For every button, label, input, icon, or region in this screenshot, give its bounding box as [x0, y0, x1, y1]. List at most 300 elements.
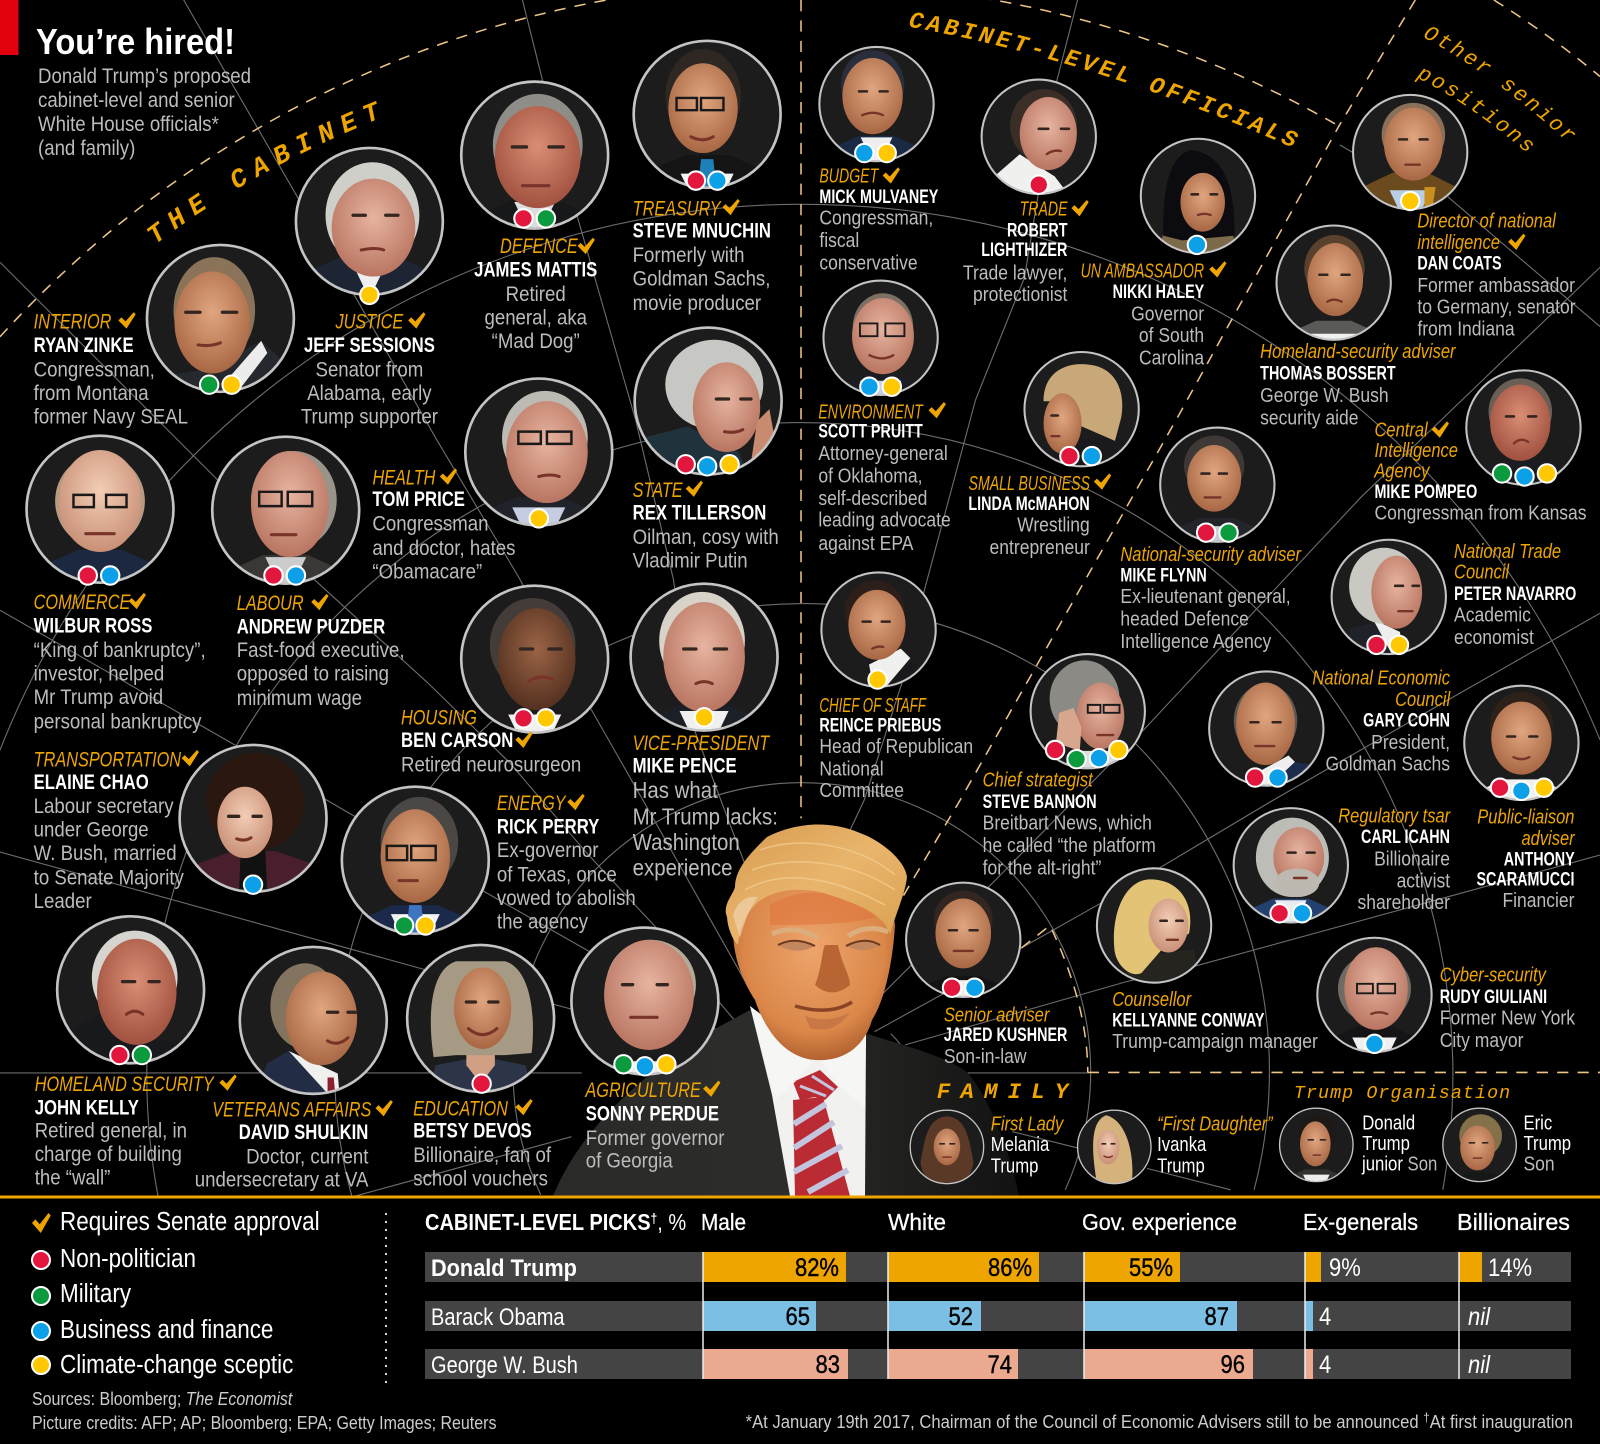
portrait: James Mattis [459, 82, 610, 245]
text: Commerce: WILBUR ROSS [34, 615, 153, 638]
portrait: Jared Kushner [905, 882, 1022, 998]
text: Commerce [34, 591, 206, 734]
portrait: Rudy Giuliani [1316, 936, 1433, 1054]
text: Agriculture: Former governor [586, 1127, 725, 1150]
text: Veterans affairs: VETERANS AFFAIRS [212, 1098, 372, 1122]
footnotes: † [1423, 1410, 1430, 1425]
text: Labour: ANDREW PUZDER [237, 616, 385, 639]
text: Veterans affairs: DAVID SHULKIN [239, 1121, 368, 1144]
text: Housing: Retired neurosurgeon [401, 753, 581, 777]
text: National Economic Council: GARY COHN [1363, 709, 1450, 731]
text: Commerce: “King of bankruptcy”, [34, 639, 206, 662]
text: Vice-president: MIKE PENCE [633, 755, 737, 778]
portrait: Tom Price [464, 377, 614, 529]
text: Health: and doctor, hates [372, 537, 515, 560]
text: Eric Trump: Son [1523, 1152, 1555, 1175]
chart: cabinet-level picks: , % [657, 1208, 686, 1235]
text: National-security adviser [1120, 543, 1302, 652]
portrait: Mike Flynn [1159, 426, 1276, 543]
portrait: Ryan Zinke [147, 245, 294, 396]
text: Budget: Congressman, [819, 206, 933, 229]
text: Energy: vowed to abolish [497, 887, 636, 910]
Donald Trump portrait [553, 824, 1019, 1196]
text: Commerce: personal bankruptcy [34, 710, 202, 734]
text: Senior adviser: JARED KUSHNER [944, 1024, 1067, 1045]
text: National Economic Council: National Economic [1312, 666, 1450, 689]
text: Labour: Fast-food executive, [237, 639, 405, 662]
portrait: Ivanka Trump [1078, 1110, 1151, 1184]
text: Donald Trump junior [1361, 1111, 1437, 1175]
text: Cyber-security: City mayor [1440, 1029, 1523, 1051]
text: Energy: RICK PERRY [497, 816, 599, 839]
text: Budget: BUDGET [819, 164, 879, 187]
text: State [633, 479, 779, 573]
bars: Barack Obama: 4 [1319, 1303, 1331, 1330]
text: Labour: opposed to raising [237, 662, 389, 686]
text: Small business [968, 471, 1111, 558]
text: Director of national intelligence: Director of national [1417, 209, 1557, 232]
heading: CABINET-LEVEL OFFICIALS: CABINET-LEVEL OFFICIALS [910, 12, 1298, 146]
text: Donald Trump junior: Donald [1362, 1111, 1415, 1134]
text: Chief of staff: Committee [819, 779, 904, 801]
text: Chief strategist: STEVE BANNON [983, 791, 1097, 813]
text: Counsellor: Trump-campaign manager [1112, 1030, 1318, 1052]
bars: Barack Obama: 52 [949, 1303, 973, 1330]
text: Counsellor [1112, 988, 1318, 1052]
text: Central Intelligence Agency [1373, 418, 1587, 524]
chart: cabinet-level picks: Male [701, 1209, 746, 1235]
text: First Daughter: Ivanka [1157, 1133, 1207, 1155]
text: Education [413, 1097, 551, 1191]
text: Justice: Senator from [316, 358, 423, 382]
text: National Economic Council [1312, 666, 1451, 775]
text: National Trade Council: National Trade [1454, 540, 1561, 563]
text: Cyber-security: Cyber-security [1440, 963, 1548, 986]
text: Homeland-security adviser: security aide [1260, 406, 1358, 429]
text: Director of national intelligence [1417, 209, 1576, 340]
text: National Economic Council: Goldman Sachs [1325, 752, 1450, 775]
text: Environment: self-described [818, 487, 927, 509]
portrait: Andrew Puzder [210, 437, 361, 600]
text: Education: BETSY DEVOS [413, 1120, 532, 1143]
portrait: Donald Trump junior [1278, 1108, 1354, 1182]
text: Chief strategist: Breitbart News, which [983, 812, 1152, 834]
text: Transportation: Leader [34, 890, 92, 913]
text: State: Vladimir Putin [633, 549, 748, 573]
text: Director of national intelligence: intelligence [1417, 230, 1500, 253]
text: Transportation: Labour secretary [34, 795, 174, 819]
text: Public-liaison adviser: SCARAMUCCI [1476, 869, 1574, 890]
text: Transportation: to Senate Majority [34, 867, 184, 890]
text: National-security adviser: Ex-lieutenant general, [1120, 585, 1291, 607]
portrait: Eric Trump [1442, 1108, 1517, 1182]
portrait: Elaine Chao [180, 745, 327, 896]
text: Defence: “Mad Dog” [492, 330, 580, 353]
bars: Donald Trump: 82% [795, 1254, 839, 1281]
text: Vice-president: experience [633, 854, 733, 881]
chart: cabinet-level picks: White [888, 1209, 946, 1235]
text: Interior: from Montana [34, 382, 149, 405]
text: Health [372, 467, 515, 584]
portrait: Dan Coats [1352, 94, 1468, 212]
text: Public-liaison adviser [1476, 805, 1575, 911]
text: Treasury: Formerly with [633, 244, 744, 268]
bars: Donald Trump: 55% [1129, 1254, 1173, 1281]
text: Central Intelligence Agency: Congressman from Kansas [1374, 501, 1587, 524]
title: Donald Trump’s proposed [38, 65, 251, 88]
bars: George W. Bush: nil [1468, 1351, 1491, 1378]
text: National Trade Council: economist [1454, 626, 1535, 648]
text: Commerce: investor, helped [34, 662, 164, 686]
portrait: Wilbur Ross [24, 436, 176, 595]
text: Small business: SMALL BUSINESS [969, 471, 1090, 494]
text: UN ambassador: NIKKI HALEY [1113, 281, 1205, 303]
bars: Donald Trump [431, 1252, 1532, 1282]
text: Central Intelligence Agency: Intelligence [1374, 439, 1458, 461]
text: Environment: SCOTT PRUITT [818, 421, 923, 442]
text: Chief of staff: Head of Republican [819, 735, 973, 757]
legend: Non-politician [60, 1245, 196, 1273]
text: National Trade Council: Council [1454, 560, 1510, 583]
bars: Barack Obama: 65 [786, 1303, 810, 1330]
text: Justice: Trump supporter [301, 405, 438, 429]
divider line above legend [0, 1196, 1600, 1198]
text: National Economic Council: President, [1371, 731, 1450, 753]
chart: cabinet-level picks: † [651, 1210, 657, 1226]
portrait: Kellyanne Conway [1097, 868, 1211, 986]
text: Budget: conservative [819, 251, 918, 274]
text: First Daughter: Trump [1157, 1154, 1205, 1177]
text: Agriculture: AGRICULTURE [585, 1079, 701, 1103]
text: Small business: LINDA McMAHON [968, 493, 1090, 515]
text: Commerce: Mr Trump avoid [34, 686, 163, 709]
portrait: John Kelly [57, 916, 204, 1067]
text: Eric Trump [1523, 1111, 1571, 1175]
text: Homeland-security adviser: George W. Bush [1260, 384, 1389, 406]
chart: cabinet-level picks [425, 1208, 1571, 1379]
text: Regulatory tsar: activist [1397, 870, 1451, 892]
chart: cabinet-level picks: Billionaires [1457, 1209, 1570, 1235]
portrait: Steve Mnuchin [632, 40, 782, 191]
text: Small business: entrepreneur [990, 536, 1090, 558]
text: Director of national intelligence: DAN COATS [1417, 252, 1502, 274]
text: Budget [819, 164, 939, 274]
bars: Donald Trump: Donald Trump [431, 1254, 577, 1281]
text: National Trade Council [1454, 540, 1576, 648]
text: Agriculture [585, 1079, 725, 1173]
text: Trade: LIGHTHIZER [981, 239, 1067, 261]
portrait: Rex Tillerson [635, 328, 782, 479]
portrait: Linda McMahon [1024, 352, 1139, 470]
text: Eric Trump: Eric [1523, 1111, 1552, 1134]
text: UN ambassador: Governor [1131, 302, 1204, 325]
portrait: Anthony Scaramucci [1463, 686, 1580, 814]
text: Small business: Wrestling [1017, 514, 1090, 536]
text: Vice-president: Mr Trump lacks: [633, 803, 778, 830]
portrait: Sonny Perdue [570, 926, 720, 1076]
text: Housing: HOUSING [401, 706, 477, 730]
text: Defence: general, aka [484, 306, 588, 330]
text: Veterans affairs [195, 1098, 393, 1192]
text: Interior: INTERIOR [34, 311, 112, 334]
heading: Other senior positions: Other senior [1424, 27, 1576, 137]
text: Education: EDUCATION [413, 1097, 508, 1121]
text: Interior: former Navy SEAL [34, 405, 188, 429]
text: Central Intelligence Agency: MIKE POMPEO [1374, 481, 1477, 503]
text: Justice: Alabama, early [307, 382, 432, 405]
text: Vice-president: Washington [633, 829, 740, 855]
text: Chief strategist: Chief strategist [983, 768, 1094, 791]
legend: Requires Senate approval [60, 1208, 320, 1236]
text: Energy: the agency [497, 910, 588, 934]
text: Housing: BEN CARSON [401, 729, 513, 753]
text: Interior: RYAN ZINKE [34, 334, 134, 358]
bars: George W. Bush: 4 [1319, 1351, 1331, 1378]
text: Chief of staff [819, 695, 973, 801]
text: Homeland-security adviser: THOMAS BOSSERT [1260, 363, 1396, 384]
text: First Lady [991, 1112, 1065, 1177]
text: Defence: Retired [506, 283, 566, 306]
bars: Donald Trump: 86% [988, 1254, 1032, 1281]
text: Trade: Trade lawyer, [963, 262, 1067, 284]
text: First Daughter [1157, 1112, 1273, 1177]
text: Chief of staff: National [819, 757, 884, 780]
text: Transportation: W. Bush, married [34, 842, 177, 866]
text: Counsellor: KELLYANNE CONWAY [1112, 1009, 1265, 1031]
text: Donald Trump junior: junior Son [1361, 1152, 1437, 1175]
chart: cabinet-level picks: Gov. experience [1082, 1209, 1237, 1235]
text: National-security adviser: Intelligence Agency [1120, 630, 1272, 652]
text: Agriculture: SONNY PERDUE [586, 1103, 719, 1126]
text: Chief of staff: CHIEF OF STAFF [819, 695, 927, 717]
text: Treasury: STEVE MNUCHIN [633, 220, 771, 243]
text: First Lady: Melania [991, 1133, 1050, 1155]
text: Treasury: movie producer [633, 292, 761, 316]
text: Senior adviser: Son-in-law [944, 1045, 1027, 1068]
text: Regulatory tsar: shareholder [1358, 891, 1450, 913]
sources [32, 1388, 497, 1433]
text: Treasury: Goldman Sachs, [633, 268, 770, 291]
text: Energy: ENERGY [497, 792, 567, 816]
text: Budget: MICK MULVANEY [819, 186, 939, 208]
text: Senior adviser: Senior adviser [944, 1003, 1050, 1026]
title: (and family) [38, 137, 135, 160]
bars: Barack Obama: 87 [1205, 1303, 1229, 1330]
text: First Lady: First Lady [991, 1112, 1065, 1135]
text: Homeland security: Retired general, in [35, 1120, 187, 1143]
text: Regulatory tsar: Billionaire [1374, 847, 1450, 870]
bars: Barack Obama: nil [1468, 1303, 1491, 1330]
chart: cabinet-level picks: Ex-generals [1303, 1209, 1418, 1235]
footnotes: At first inauguration [1430, 1411, 1573, 1432]
text: Cyber-security [1440, 963, 1576, 1051]
text: Environment: leading advocate [818, 508, 951, 531]
text: National Economic Council: Council [1395, 688, 1451, 710]
text: Education: Billionaire, fan of [413, 1144, 551, 1168]
text: Transportation: ELAINE CHAO [34, 771, 149, 794]
legend [32, 1208, 320, 1379]
dotted separator [385, 1213, 387, 1384]
bars: George W. Bush: 74 [988, 1351, 1012, 1378]
text: Education: school vouchers [413, 1168, 548, 1191]
text: Director of national intelligence: from Indiana [1417, 318, 1515, 340]
text: Energy: Ex-governor [497, 839, 599, 862]
title: White House officials* [38, 113, 219, 136]
heading: FAMILY: FAMILY [937, 1079, 1071, 1105]
text: Vice-president [633, 732, 778, 881]
legend: Business and finance [60, 1316, 273, 1344]
text: Eric Trump: Trump [1523, 1132, 1571, 1154]
text: National Trade Council: PETER NAVARRO [1454, 583, 1576, 605]
text: UN ambassador: of South [1139, 324, 1204, 346]
text: Interior: Congressman, [34, 358, 155, 382]
chart: cabinet-level picks: CABINET-LEVEL PICKS [425, 1208, 651, 1235]
text: Labour: LABOUR [237, 592, 304, 616]
text: State: Oilman, cosy with [633, 526, 779, 549]
text: Public-liaison adviser: Public-liaison [1477, 805, 1574, 828]
text: Public-liaison adviser: adviser [1521, 826, 1575, 849]
text: National-security adviser: MIKE FLYNN [1120, 565, 1207, 586]
text: Transportation [34, 748, 199, 913]
portrait: Reince Priebus [821, 572, 936, 690]
portrait: Mike Pence [629, 582, 779, 732]
portrait: Mike Pompeo [1465, 370, 1582, 494]
portrait: Carl Icahn [1232, 808, 1350, 934]
portrait: Peter Navarro [1332, 540, 1446, 657]
text: Defence: JAMES MATTIS [474, 259, 597, 282]
sources: Sources: Bloomberg; The Economist [32, 1388, 293, 1409]
text: National Trade Council: Academic [1454, 603, 1531, 626]
text: Health: “Obamacare” [372, 560, 482, 584]
text: Chief strategist: he called “the platform [983, 834, 1156, 856]
portrait: Nikki Haley [1141, 139, 1255, 256]
text: Central Intelligence Agency: Central [1374, 418, 1429, 441]
text: Senior adviser [944, 1003, 1067, 1068]
text: Budget: fiscal [819, 229, 859, 251]
text: Homeland security: charge of building [35, 1143, 182, 1167]
text: Homeland security: JOHN KELLY [35, 1096, 139, 1120]
title [0, 0, 251, 160]
text: Health: HEALTH [372, 467, 436, 490]
text: Agriculture: of Georgia [586, 1149, 674, 1173]
text: Director of national intelligence: Former ambassador [1417, 274, 1575, 296]
text: Regulatory tsar: CARL ICAHN [1361, 826, 1450, 847]
text: Regulatory tsar: Regulatory tsar [1338, 804, 1451, 827]
text: Environment: of Oklahoma, [818, 465, 922, 487]
footnotes: *At January 19th 2017, Chairman of the Council of Economic Advisers still to be announced [746, 1411, 1419, 1432]
text: UN ambassador [1081, 259, 1227, 369]
text: Defence: DEFENCE [500, 235, 578, 259]
text: Donald Trump junior: Trump [1362, 1132, 1410, 1154]
text: Chief of staff: REINCE PRIEBUS [819, 715, 941, 736]
text: First Daughter: “First Daughter” [1157, 1112, 1273, 1135]
text: Cyber-security: Former New York [1440, 1006, 1576, 1029]
text: Treasury: TREASURY [633, 197, 722, 221]
heading: THE CABINET: THE CABINET [146, 100, 377, 242]
text: National-security adviser: headed Defence [1120, 607, 1249, 630]
text: Environment [818, 400, 951, 554]
text: Health: TOM PRICE [372, 488, 465, 512]
text: Health: Congressman [372, 512, 488, 536]
portrait: Melania Trump [910, 1110, 984, 1184]
text: Energy: of Texas, once [497, 863, 617, 887]
text: Vice-president: VICE-PRESIDENT [633, 732, 770, 756]
portrait: Steve Bannon [1031, 654, 1145, 772]
text: Commerce: COMMERCE [34, 591, 131, 615]
portrait: David Shulkin [240, 947, 387, 1098]
bars: Barack Obama: Barack Obama [431, 1303, 565, 1330]
text: Justice [301, 311, 438, 429]
text: State: STATE [633, 479, 683, 503]
bars: George W. Bush: George W. Bush [431, 1351, 578, 1378]
text: Transportation: TRANSPORTATION [34, 748, 181, 772]
text: Homeland security [35, 1073, 237, 1190]
legend: Climate-change sceptic [60, 1351, 293, 1379]
text: Chief strategist: for the alt-right” [983, 856, 1101, 879]
text: Energy [497, 792, 636, 934]
text: Labour [237, 592, 405, 710]
portrait: Scott Pruitt [822, 280, 939, 397]
text: Public-liaison adviser: Financier [1502, 889, 1574, 911]
text: Central Intelligence Agency: Agency [1373, 459, 1431, 482]
text: Public-liaison adviser: ANTHONY [1504, 848, 1575, 870]
bars: Barack Obama [431, 1301, 1491, 1331]
text: Trade: TRADE [1020, 197, 1068, 220]
text: Vice-president: Has what [633, 777, 718, 803]
bars: George W. Bush: 83 [816, 1351, 840, 1378]
text: National-security adviser: National-security adviser [1120, 543, 1302, 566]
portrait: Mick Mulvaney [818, 47, 935, 171]
text: Homeland security: HOMELAND SECURITY [35, 1073, 215, 1096]
text: Transportation: under George [34, 819, 149, 842]
text: Trade [963, 197, 1089, 305]
text: Regulatory tsar [1338, 804, 1451, 913]
sources: Picture credits: AFP; AP; Bloomberg; EPA; Getty Images; Reuters [32, 1412, 497, 1433]
text: Homeland-security adviser [1260, 340, 1456, 429]
text: Justice: JEFF SESSIONS [304, 334, 435, 358]
portrait: Ben Carson [460, 584, 610, 734]
text: Veterans affairs: undersecretary at VA [195, 1169, 369, 1192]
text: Counsellor: Counsellor [1112, 988, 1192, 1010]
text: Justice: JUSTICE [335, 311, 404, 334]
text: UN ambassador: Carolina [1139, 346, 1205, 369]
text: Director of national intelligence: to Germany, senator [1417, 295, 1576, 318]
portrait: Gary Cohn [1209, 671, 1323, 789]
text: Trade: ROBERT [1007, 220, 1068, 241]
text: Environment: Attorney-general [818, 442, 948, 464]
text: Labour: minimum wage [237, 687, 362, 710]
text: Veterans affairs: Doctor, current [246, 1145, 369, 1169]
text: Housing [401, 706, 581, 777]
text: Homeland security: the “wall” [35, 1167, 110, 1190]
title: You’re hired! [36, 21, 235, 62]
portrait: Jeff Sessions [294, 148, 445, 304]
text: Chief strategist [983, 768, 1156, 879]
text: Homeland-security adviser: Homeland-security adviser [1260, 340, 1456, 363]
text: Treasury [633, 197, 771, 316]
legend: Military [60, 1280, 132, 1308]
portrait: Betsy DeVos [407, 945, 554, 1096]
heading: Trump Organisation: Trump Organisation [1294, 1083, 1510, 1104]
portrait: Robert Lighthizer [982, 80, 1096, 197]
dashed section dividers [0, 0, 1600, 1072]
bars: George W. Bush [431, 1349, 1491, 1379]
text: Environment: against EPA [818, 532, 914, 554]
text: Cyber-security: RUDY GIULIANI [1440, 986, 1547, 1008]
text: First Lady: Trump [991, 1154, 1038, 1177]
heading: Other senior positions: positions [1414, 68, 1533, 150]
text: Defence [474, 235, 597, 353]
